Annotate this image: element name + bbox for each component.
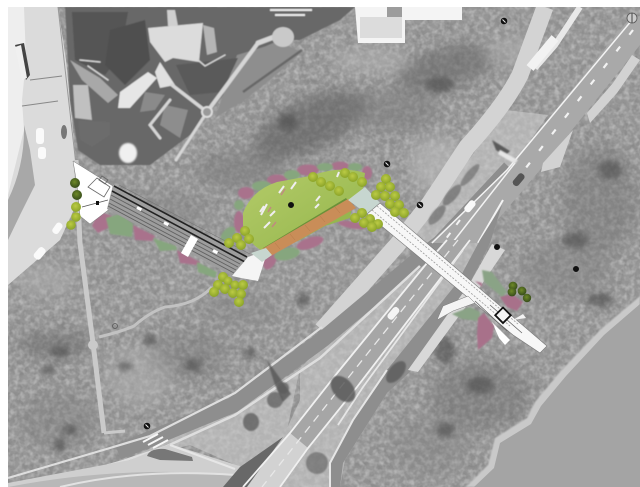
west plaza and bridge deck <box>73 161 272 281</box>
mansion complex <box>65 7 355 165</box>
planting ring around park <box>92 162 372 278</box>
picnic tables on lawn <box>260 172 339 228</box>
top building <box>355 7 462 43</box>
pedestrian path: straight walk <box>76 160 125 433</box>
highway upper section <box>430 16 640 243</box>
east landing planting <box>452 270 523 350</box>
east bridge deck <box>348 187 547 353</box>
road C: central carriageway <box>223 240 470 487</box>
water: river <box>466 296 640 487</box>
road D: southern carriageway with pale strip <box>330 205 505 487</box>
vehicles on highway <box>386 172 526 321</box>
vehicles on left road <box>32 125 67 261</box>
viewpoint markers <box>144 18 578 429</box>
dark ramp road <box>8 168 510 487</box>
trees <box>66 168 531 307</box>
boardwalk <box>262 199 356 257</box>
pedestrian path: winding trail <box>99 287 212 337</box>
bottom grass and curved road <box>8 434 252 487</box>
service strip <box>322 7 580 330</box>
grass medians along highway <box>120 110 548 487</box>
bridge landing <box>232 250 268 281</box>
park lawn <box>243 170 365 256</box>
tree shadows and median trees <box>243 140 518 474</box>
icon: north arrow <box>627 13 637 23</box>
left road <box>8 7 76 285</box>
east tower: black square <box>495 308 511 323</box>
